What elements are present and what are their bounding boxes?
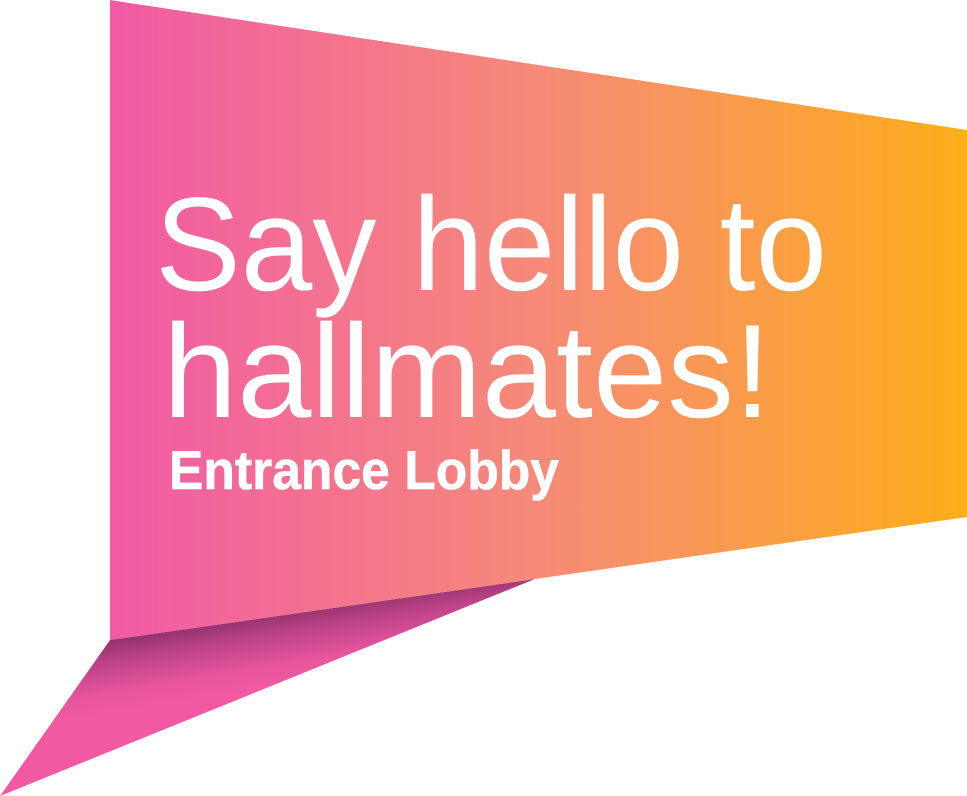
title [155, 171, 827, 446]
banner tail [0, 579, 535, 796]
title: Say hello to [155, 171, 827, 319]
subtitle: Entrance Lobby [169, 439, 559, 501]
banner body [110, 0, 967, 640]
title: hallmates! [163, 298, 771, 446]
